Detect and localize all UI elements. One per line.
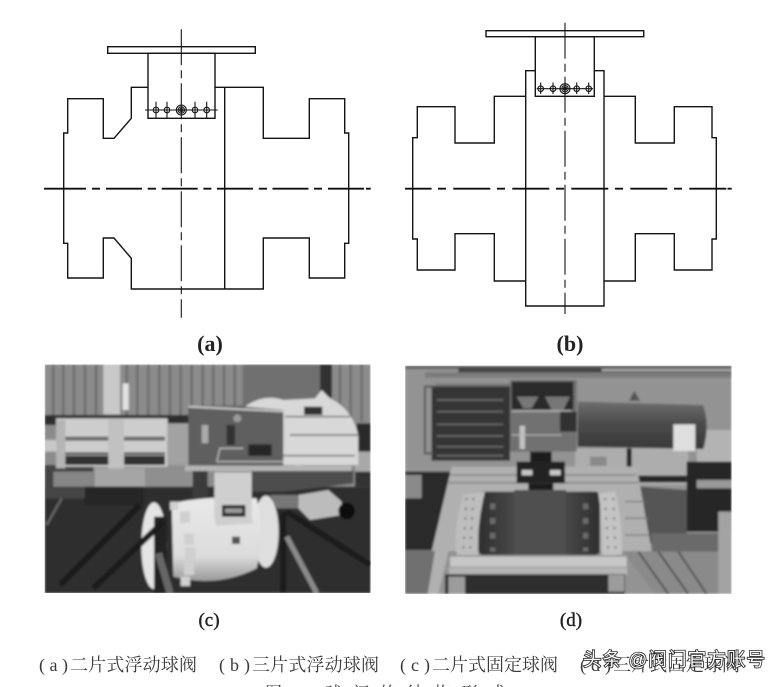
- wooden crate: [432, 467, 652, 551]
- dark post and band: [627, 448, 687, 482]
- factory wall: [405, 366, 732, 594]
- top plate (a): [108, 47, 255, 53]
- right end piece (b): [604, 96, 716, 281]
- label (d): (d): [560, 610, 582, 631]
- valve body: [172, 497, 261, 581]
- diagram (b): three-piece floating ball valve: [405, 23, 732, 314]
- valve right flange: [253, 496, 279, 568]
- vertical post: [103, 364, 120, 414]
- receiver cylinder: [578, 402, 707, 449]
- ground: [45, 487, 371, 593]
- caption row: four valve types: [39, 655, 740, 676]
- label (b): (b): [557, 331, 583, 356]
- nameplate: [222, 505, 245, 517]
- bolts d: [493, 503, 586, 552]
- yoke bracket on valve: [214, 472, 254, 526]
- caption c: (c): [400, 655, 430, 676]
- valve body: [478, 492, 600, 555]
- actuator drum: [432, 386, 510, 461]
- cardboard box: [640, 487, 687, 543]
- vertical centre line (b): [564, 23, 566, 314]
- wall ribs: [53, 364, 362, 422]
- vertical centre line (a): [180, 29, 182, 318]
- stem: [530, 452, 552, 462]
- pneumatic cylinder: [56, 418, 168, 467]
- dark shelving: [687, 462, 732, 532]
- front plank: [450, 557, 627, 567]
- left flange d: [456, 492, 485, 555]
- round actuator: [245, 390, 358, 465]
- photo (d): three-piece trunnion ball valve: [405, 366, 732, 594]
- black stand: [60, 505, 371, 593]
- stem housing (b): [535, 37, 594, 96]
- outer flange: [428, 510, 457, 594]
- diagram (a): two-piece floating ball valve: [44, 29, 371, 318]
- left clutter: [405, 472, 450, 550]
- watermark: 头条 @阀门官方账号: [583, 649, 765, 670]
- actuator underside: [252, 470, 353, 492]
- caption a: 二片式浮动球阀: [70, 655, 197, 675]
- horizontal centre line (b): [405, 188, 732, 190]
- horizontal centre line (a): [44, 188, 371, 190]
- wall panel at right: [697, 430, 732, 462]
- label (a): (a): [197, 331, 223, 356]
- lower wall: [575, 448, 688, 485]
- overhead pipe: [405, 366, 732, 369]
- caption c: 二片式固定球阀: [432, 655, 558, 675]
- trolley: [298, 490, 342, 520]
- photo (c): two-piece trunnion ball valve: [45, 364, 371, 593]
- corrugated wall: [44, 364, 371, 488]
- floor: [405, 550, 435, 594]
- base block: [95, 468, 145, 487]
- caption d: (d): [580, 655, 611, 676]
- bolts: [170, 502, 196, 586]
- brick wall: [93, 465, 193, 487]
- label (c): (c): [198, 610, 220, 631]
- lug: [629, 391, 640, 401]
- caption b: (b): [219, 655, 250, 676]
- control panel: [510, 380, 577, 452]
- dark column: [320, 364, 332, 398]
- caption d: 三片式固定球阀: [613, 655, 740, 675]
- body joint line (a): [224, 87, 226, 289]
- tag: [673, 424, 695, 451]
- bolt row (a): [145, 102, 218, 118]
- caption a: (a): [39, 655, 68, 676]
- bolt row (b): [537, 82, 593, 94]
- caption b: 三片式浮动球阀: [252, 655, 379, 675]
- top plate (b): [486, 31, 644, 37]
- roller shutter: [243, 364, 320, 408]
- valve body outline (a): [64, 87, 349, 289]
- under crate: [445, 574, 625, 594]
- right crate: [718, 512, 732, 594]
- clamp: [517, 462, 565, 483]
- support column: [193, 471, 208, 498]
- right flange d: [598, 492, 622, 555]
- yoke block: [167, 423, 191, 465]
- centre body section (b): [526, 71, 604, 306]
- cylinder bracket: [108, 418, 124, 470]
- left end piece (b): [413, 96, 526, 281]
- left flange: [141, 502, 167, 589]
- dark band: [45, 415, 191, 425]
- stem housing (a): [148, 53, 215, 118]
- control panel box: [188, 406, 283, 466]
